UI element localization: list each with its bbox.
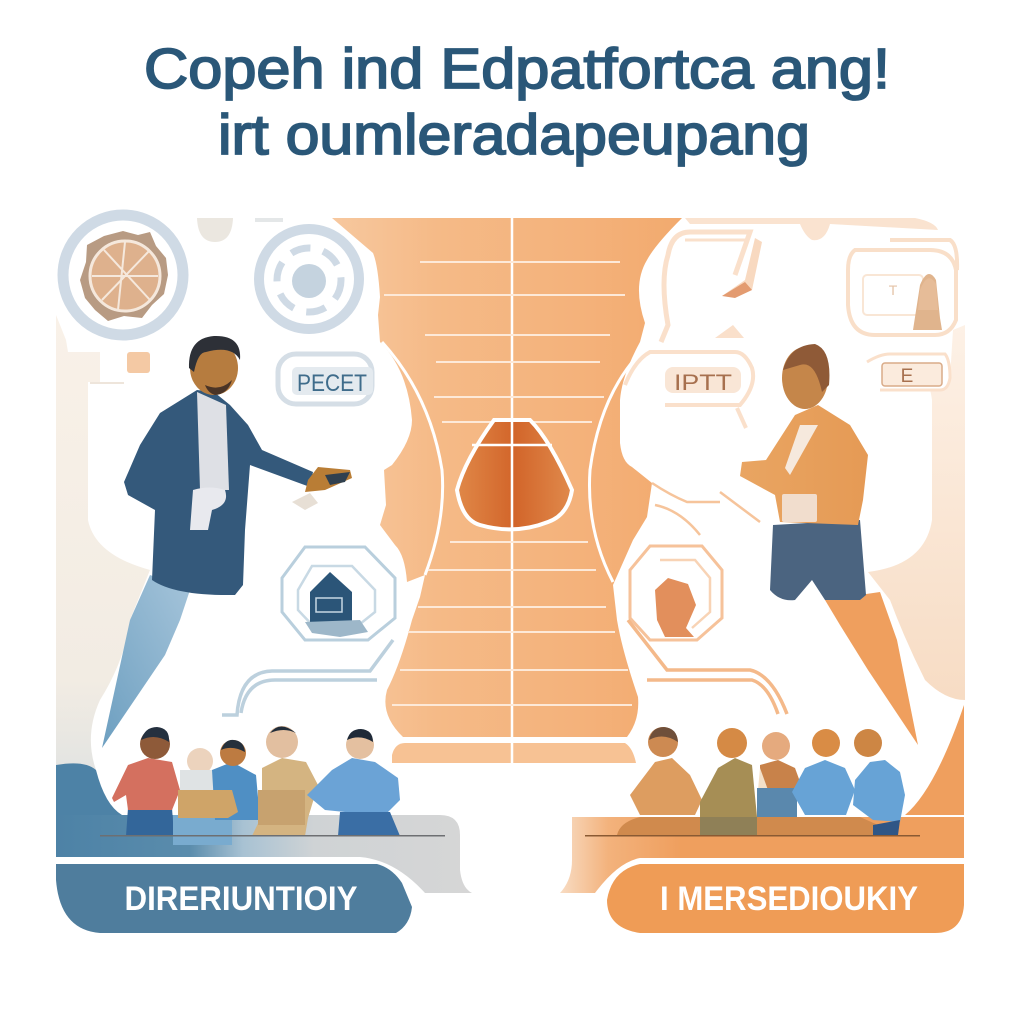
- connector: left curved: [222, 640, 393, 715]
- panel: left background: [56, 218, 472, 893]
- label: LE: E: [901, 366, 913, 387]
- label: PECET: [278, 354, 373, 404]
- panel: central orange hourglass: [332, 218, 682, 763]
- button: left label: DIRERIUNTIOIY: [124, 880, 358, 918]
- person 4: [252, 726, 318, 836]
- label: IPTT: [625, 352, 753, 428]
- title: [144, 37, 890, 167]
- connector: right curved: [628, 620, 787, 714]
- figure: right presenter: [740, 344, 918, 745]
- button: left label: [56, 864, 412, 933]
- label: IPTT: IPTT: [674, 370, 732, 395]
- icon: right sketch box: T: [889, 282, 898, 298]
- panel: right background: [560, 218, 965, 893]
- icon: central dome: [457, 420, 572, 530]
- icon: right badge: [630, 546, 722, 640]
- icon: right top bracket: [661, 232, 762, 342]
- person 5: [853, 729, 905, 822]
- icon: left house badge: [282, 547, 395, 640]
- person 1: [630, 727, 702, 815]
- figure: left presenter: [102, 336, 352, 748]
- group: left people: [100, 726, 445, 845]
- person 3: [178, 740, 260, 820]
- lines: right swoops: [652, 483, 760, 535]
- button: right label: I MERSEDIOUKIY: [660, 880, 918, 918]
- person 5: [307, 729, 400, 836]
- icon: ring target: [259, 229, 359, 329]
- person 2: [173, 748, 232, 845]
- person 4: [792, 729, 855, 815]
- group: right people: [585, 727, 920, 836]
- title: Copeh ind Edpatfortca ang!: [144, 37, 890, 101]
- icon: right sketch box: [848, 240, 957, 335]
- label: PECET: PECET: [297, 370, 367, 397]
- person 2: [700, 728, 757, 817]
- label: LE: [867, 354, 950, 390]
- person 3: [757, 732, 803, 817]
- person 1: [112, 727, 180, 836]
- icon: seed circle: [63, 215, 183, 335]
- title: irt oumleradapeupang: [218, 103, 810, 167]
- button: right label: [607, 864, 964, 933]
